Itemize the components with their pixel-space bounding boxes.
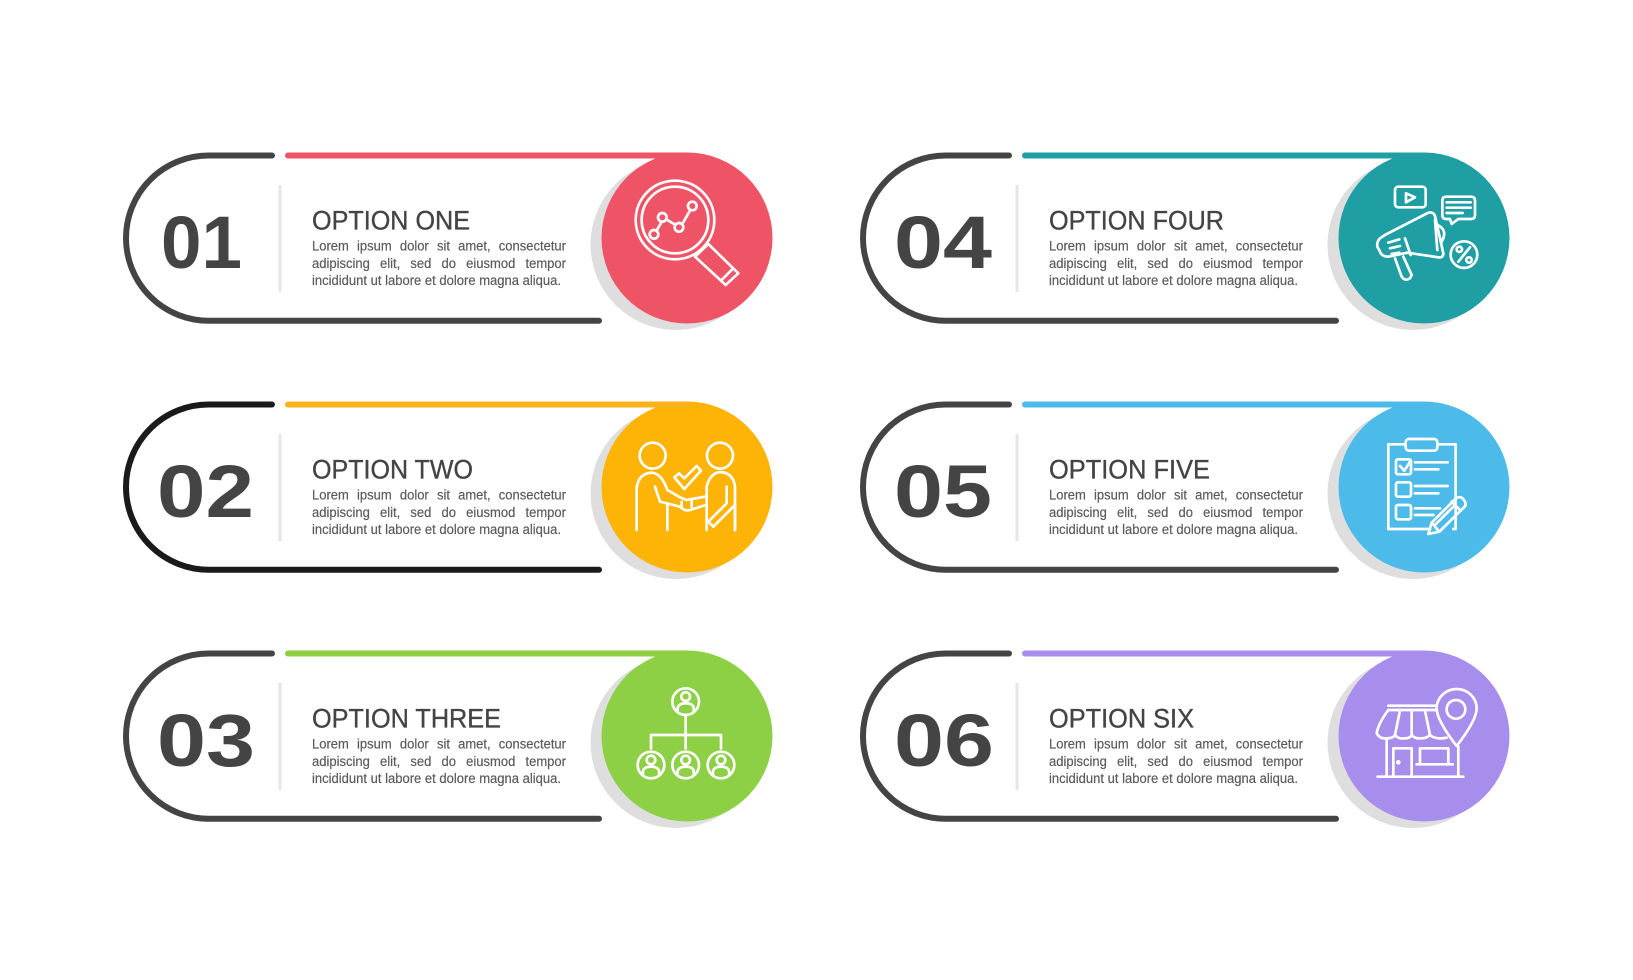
body text: incididunt ut labore et dolore magna aliqua. (312, 771, 561, 786)
frame outline (126, 404, 599, 570)
body text (1049, 239, 1303, 288)
body text: adipiscing elit, sed do eiusmod tempor (1049, 754, 1303, 769)
body text: Lorem ipsum dolor sit amet, consectetur (312, 239, 566, 254)
frame outline (863, 654, 1336, 819)
frame outline (126, 654, 599, 819)
body text: Lorem ipsum dolor sit amet, consectetur (1049, 239, 1303, 254)
body text (1049, 488, 1303, 537)
panel: option four (863, 152, 1510, 330)
body text (312, 737, 566, 786)
body text: Lorem ipsum dolor sit amet, consectetur (312, 737, 566, 752)
number: 05 (894, 450, 992, 533)
divider (278, 185, 282, 292)
body text: adipiscing elit, sed do eiusmod tempor (1049, 505, 1303, 520)
body text: incididunt ut labore et dolore magna aliqua. (312, 273, 561, 288)
icon: storefront with location pin (1377, 689, 1477, 777)
accent circle (602, 152, 772, 324)
accent circle (1338, 402, 1510, 572)
heading: OPTION SIX (1049, 704, 1194, 734)
number: 04 (894, 201, 992, 284)
body text: Lorem ipsum dolor sit amet, consectetur (1049, 488, 1303, 503)
icon: handshake (637, 443, 735, 530)
panel: option three (126, 650, 773, 828)
panel: option one (126, 152, 773, 330)
body text: incididunt ut labore et dolore magna aliqua. (1049, 522, 1298, 537)
accent line (288, 650, 687, 656)
body text: incididunt ut labore et dolore magna aliqua. (1049, 273, 1298, 288)
body text: incididunt ut labore et dolore magna aliqua. (1049, 771, 1298, 786)
panel: option six (863, 650, 1510, 828)
heading: OPTION ONE (312, 206, 470, 236)
number: 06 (894, 699, 994, 782)
number: 01 (161, 201, 242, 284)
body text (312, 239, 566, 288)
circle shadow (590, 657, 762, 828)
body text (312, 488, 566, 537)
divider (1016, 434, 1018, 541)
divider (1016, 683, 1018, 790)
icon: organization chart (638, 688, 734, 778)
accent line (1025, 650, 1424, 656)
icon: clipboard checklist with pencil (1388, 439, 1466, 534)
body text: Lorem ipsum dolor sit amet, consectetur (312, 488, 566, 503)
heading: OPTION FIVE (1049, 455, 1210, 485)
circle shadow (1328, 408, 1498, 579)
panel: option two (126, 402, 773, 579)
body text: adipiscing elit, sed do eiusmod tempor (312, 505, 566, 520)
circle shadow (590, 159, 762, 330)
frame outline (863, 156, 1336, 321)
body text: incididunt ut labore et dolore magna aliqua. (312, 522, 561, 537)
frame outline (863, 404, 1336, 570)
accent circle (602, 402, 772, 572)
accent circle (1338, 152, 1510, 324)
divider (278, 434, 282, 541)
heading: OPTION TWO (312, 455, 473, 485)
accent line (1025, 402, 1424, 408)
heading: OPTION FOUR (1049, 206, 1224, 236)
accent circle (602, 650, 772, 822)
circle shadow (590, 408, 762, 579)
panel: option five (863, 402, 1510, 579)
number: 03 (157, 699, 255, 782)
number: 02 (157, 450, 254, 533)
accent line (288, 402, 687, 408)
body text: adipiscing elit, sed do eiusmod tempor (312, 754, 566, 769)
accent line (288, 152, 687, 158)
icon: magnifier with chart (636, 181, 738, 285)
body text: Lorem ipsum dolor sit amet, consectetur (1049, 737, 1303, 752)
frame outline (126, 156, 599, 321)
divider (1016, 185, 1018, 292)
heading: OPTION THREE (312, 704, 501, 734)
accent line (1025, 152, 1424, 158)
circle shadow (1328, 159, 1498, 330)
circle shadow (1328, 657, 1498, 828)
icon: megaphone with media (1377, 187, 1477, 280)
body text: adipiscing elit, sed do eiusmod tempor (312, 256, 566, 271)
body text (1049, 737, 1303, 786)
accent circle (1338, 650, 1510, 822)
divider (278, 683, 282, 790)
body text: adipiscing elit, sed do eiusmod tempor (1049, 256, 1303, 271)
